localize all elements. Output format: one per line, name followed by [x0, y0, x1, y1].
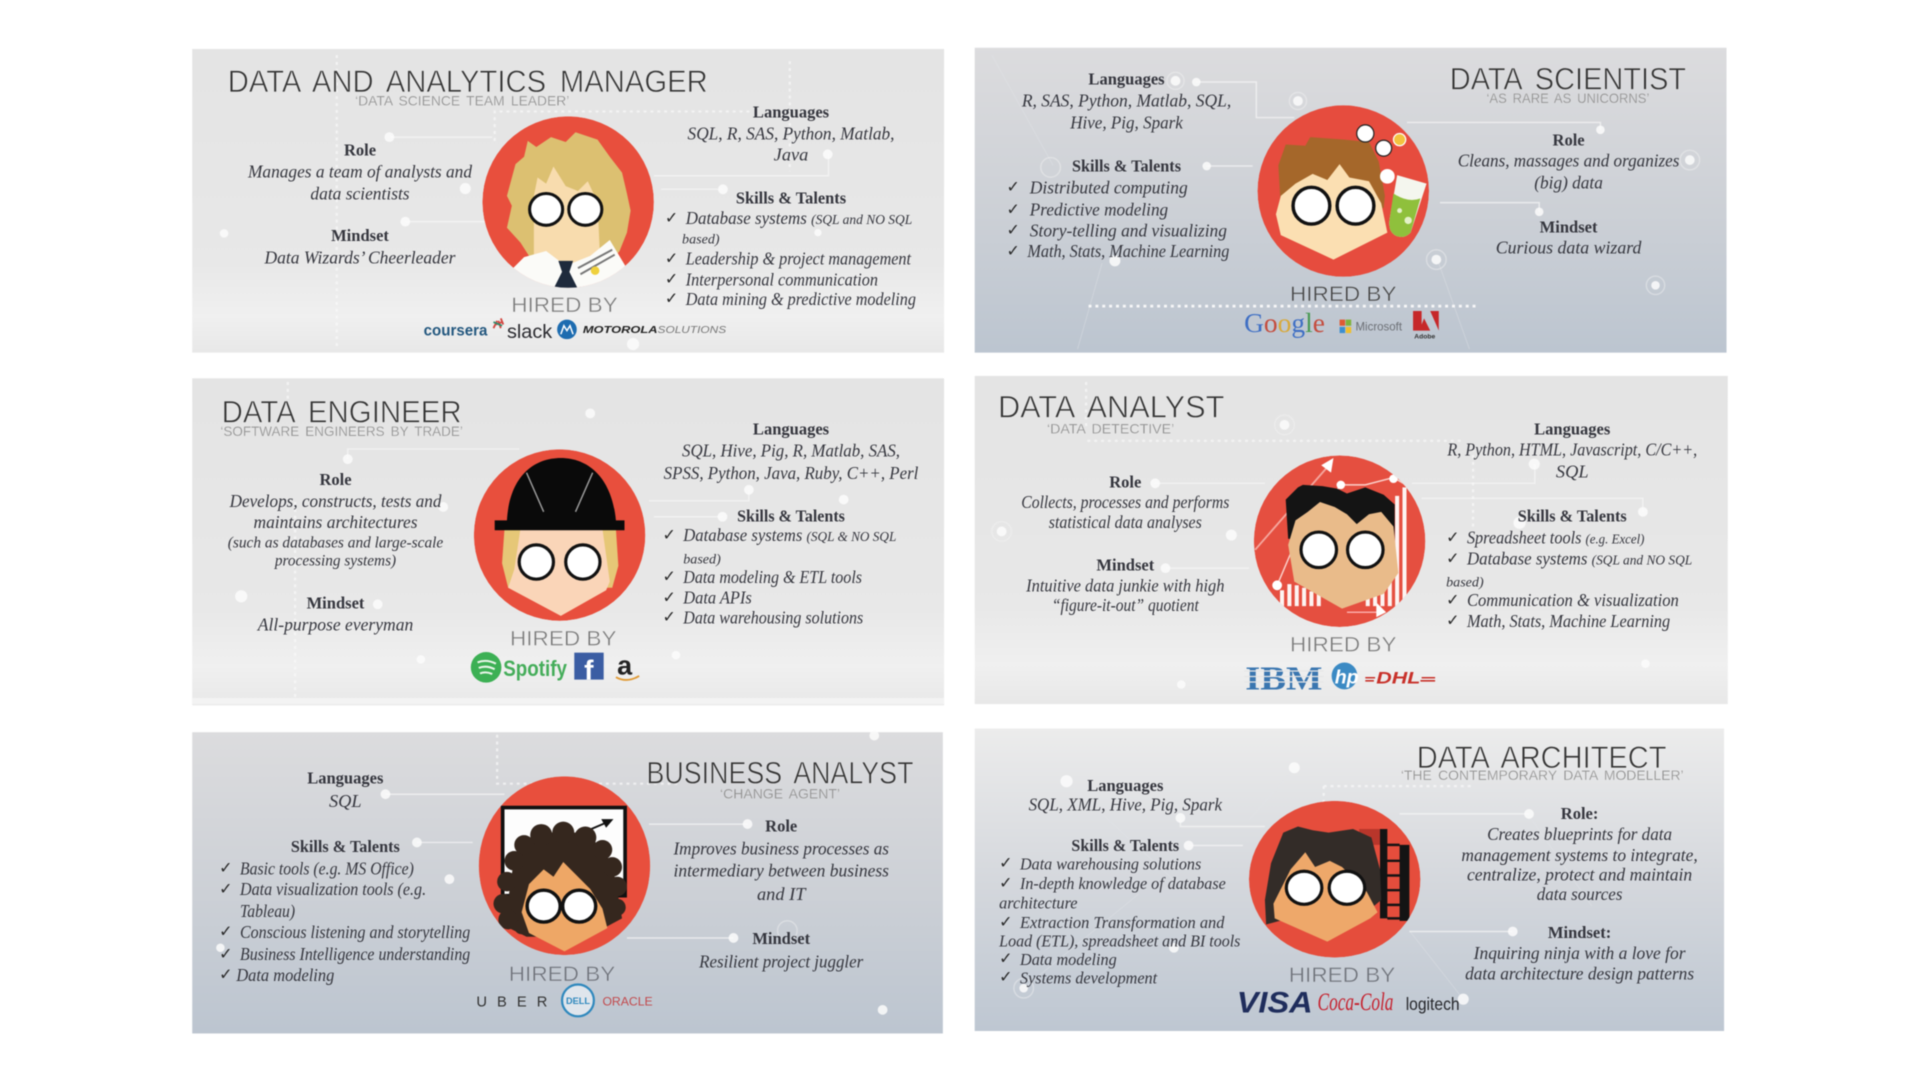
mindset block: “figure-it-out” quotient: [1052, 595, 1200, 615]
skills and talents list: Skills & Talents: [1518, 507, 1627, 526]
languages block: Languages: [753, 103, 830, 122]
role block: and IT: [757, 884, 807, 904]
title: DATA ANALYST: [998, 389, 1224, 425]
skills and talents list: Data modeling: [1019, 950, 1117, 969]
role block: Role: [319, 470, 352, 489]
title: DATA AND ANALYTICS MANAGER: [228, 63, 708, 99]
skills and talents list: based): [1446, 575, 1484, 591]
skills and talents list: ✓: [665, 208, 678, 227]
panel: data analyst: [975, 376, 1728, 704]
languages block: [1029, 776, 1223, 815]
hired by label: HIRED BY: [510, 627, 617, 650]
skills and talents list: Database systems (SQL & NO SQL: [682, 525, 896, 545]
skills and talents list: ✓: [1446, 611, 1459, 630]
skills and talents list: [1007, 156, 1229, 261]
skills and talents list: Tableau): [240, 901, 295, 921]
role block: intermediary between business: [673, 861, 889, 881]
mindset block: [264, 226, 456, 267]
skills and talents list: Predictive modeling: [1029, 200, 1168, 220]
connectors: [1014, 762, 1592, 1005]
subtitle: ‘THE CONTEMPORARY DATA MODELLER’: [1401, 767, 1684, 783]
portrait: scientist: [1258, 105, 1429, 277]
hired by label: HIRED BY: [1290, 633, 1397, 656]
logos: google, microsoft, adobe: Adobe: [1414, 334, 1435, 341]
skills and talents list: [998, 836, 1240, 987]
panel background: [192, 378, 944, 705]
logos: uber, dell, oracle: ORACLE: [602, 994, 653, 1008]
panel: data architect: [975, 729, 1724, 1031]
skills and talents list: ✓: [219, 879, 233, 898]
skills and talents list: [219, 837, 470, 985]
logos: google, microsoft, adobe: Microsoft: [1356, 320, 1403, 334]
languages block: R, Python, HTML, Javascript, C/C++,: [1446, 440, 1697, 460]
skills and talents list: ✓: [999, 912, 1013, 931]
skills and talents list: [1446, 507, 1692, 631]
skills and talents list: Data mining & predictive modeling: [685, 289, 916, 309]
subtitle: ‘DATA SCIENCE TEAM LEADER’: [355, 92, 569, 108]
skills and talents list: ✓: [999, 873, 1013, 892]
skills and talents list: Skills & Talents: [1071, 836, 1180, 855]
role block: [247, 141, 473, 204]
skills and talents list: ✓: [665, 248, 678, 267]
languages block: [1021, 69, 1231, 133]
portrait: analyst with chart: [1254, 456, 1425, 627]
mindset block: Intuitive data junkie with high: [1025, 575, 1224, 595]
languages block: Languages: [1087, 776, 1164, 795]
role block: [1021, 472, 1229, 532]
skills and talents list: Conscious listening and storytelling: [240, 922, 470, 942]
skills and talents list: ✓: [999, 967, 1013, 986]
mindset block: [698, 929, 864, 971]
panel: business analyst: [192, 731, 943, 1033]
panel background: [192, 49, 944, 353]
skills and talents list: ✓: [219, 858, 233, 877]
title: BUSINESS ANALYST: [647, 755, 913, 791]
skills and talents list: Extraction Transformation and: [1019, 913, 1225, 932]
skills and talents list: ✓: [219, 922, 233, 941]
role block: Creates blueprints for data: [1487, 824, 1672, 844]
skills and talents list: ✓: [1007, 241, 1020, 260]
skills and talents list: ✓: [665, 269, 678, 288]
skills and talents list: Communication & visualization: [1467, 590, 1679, 610]
logos: coursera, slack, motorola solutions: SOLUTIONS: [658, 325, 726, 336]
skills and talents list: ✓: [1007, 177, 1020, 196]
skills and talents list: architecture: [999, 894, 1078, 913]
skills and talents list: [662, 507, 896, 627]
skills and talents list: Spreadsheet tools (e.g. Excel): [1467, 528, 1645, 548]
logos: spotify, facebook, amazon: a: [617, 651, 633, 681]
role block: [1461, 804, 1698, 904]
panel background: [975, 376, 1728, 704]
mindset block: Mindset: [1540, 218, 1598, 237]
skills and talents list: Skills & Talents: [1072, 156, 1182, 175]
languages block: SPSS, Python, Java, Ruby, C++, Perl: [664, 463, 918, 483]
skills and talents list: Leadership & project management: [685, 248, 912, 268]
skills and talents list: Data visualization tools (e.g.: [239, 879, 426, 899]
logos: spotify, facebook, amazon: Spotify: [503, 656, 568, 681]
role block: management systems to integrate,: [1461, 845, 1698, 865]
languages block: Languages: [1534, 420, 1611, 439]
mindset block: [257, 594, 413, 635]
skills and talents list: ✓: [999, 853, 1013, 872]
skills and talents list: ✓: [999, 949, 1013, 968]
mindset block: [1496, 218, 1642, 257]
role block: Improves business processes as: [673, 839, 889, 859]
logos: visa, coca-cola, logitech: Coca-Cola: [1318, 987, 1393, 1016]
connectors: [992, 382, 1650, 689]
logos: coursera, slack, motorola solutions: [424, 318, 726, 343]
languages block: [688, 103, 894, 164]
subtitle: ‘AS RARE AS UNICORNS’: [1487, 90, 1649, 106]
skills and talents list: Math, Stats, Machine Learning: [1026, 241, 1229, 261]
panel: data scientist: [975, 48, 1727, 353]
languages block: Hive, Pig, Spark: [1069, 113, 1184, 133]
role block: processing systems): [274, 553, 396, 570]
portrait: business analyst with whiteboard: [479, 776, 650, 955]
skills and talents list: ✓: [662, 567, 676, 586]
skills and talents list: Skills & Talents: [291, 837, 400, 856]
logos: coursera, slack, motorola solutions: MOTOROLA: [583, 325, 658, 336]
logos: uber, dell, oracle: UBER: [476, 995, 547, 1011]
title: DATA ARCHITECT: [1417, 739, 1667, 775]
logos: google, microsoft, adobe: Google: [1244, 308, 1325, 338]
skills and talents list: Load (ETL), spreadsheet and BI tools: [998, 932, 1240, 951]
skills and talents list: Basic tools (e.g. MS Office): [240, 858, 414, 878]
logos: spotify, facebook, amazon: [471, 651, 639, 686]
role block: statistical data analyses: [1049, 512, 1202, 532]
title: DATA ENGINEER: [222, 393, 462, 429]
skills and talents list: ✓: [1007, 199, 1020, 218]
languages block: SQL, R, SAS, Python, Matlab,: [688, 124, 894, 144]
mindset block: Inquiring ninja with a love for: [1473, 943, 1686, 963]
skills and talents list: ✓: [662, 607, 676, 626]
logos: uber, dell, oracle: [476, 984, 653, 1016]
hired by label: HIRED BY: [511, 294, 618, 317]
skills and talents list: based): [682, 232, 720, 248]
logos: visa, coca-cola, logitech: logitech: [1406, 994, 1460, 1014]
logos: visa, coca-cola, logitech: [1237, 987, 1460, 1020]
role block: [673, 816, 889, 904]
skills and talents list: Math, Stats, Machine Learning: [1466, 611, 1670, 631]
skills and talents list: ✓: [662, 525, 676, 544]
subtitle: ‘CHANGE AGENT’: [720, 785, 840, 801]
subtitle: ‘SOFTWARE ENGINEERS BY TRADE’: [220, 423, 463, 439]
subtitle: ‘DATA DETECTIVE’: [1047, 420, 1174, 436]
panel background: [975, 729, 1724, 1031]
connectors: [192, 382, 944, 704]
skills and talents list: In-depth knowledge of database: [1019, 874, 1226, 893]
skills and talents list: Business Intelligence understanding: [240, 944, 470, 964]
mindset block: Mindset: [752, 929, 811, 948]
skills and talents list: Database systems (SQL and NO SQL: [1466, 548, 1692, 568]
role block: centralize, protect and maintain: [1467, 864, 1692, 884]
portrait: manager: [482, 116, 654, 300]
mindset block: Data Wizards’ Cheerleader: [264, 247, 456, 267]
mindset block: All-purpose everyman: [257, 615, 413, 635]
skills and talents list: ✓: [665, 289, 678, 308]
logos: ibm, hp, dhl: [1244, 659, 1435, 697]
languages block: SQL: [329, 791, 362, 811]
skills and talents list: Data warehousing solutions: [1019, 854, 1201, 873]
role block: Manages a team of analysts and: [247, 162, 473, 182]
logos: ibm, hp, dhl: hp: [1335, 666, 1359, 688]
languages block: Languages: [753, 420, 830, 439]
mindset block: Mindset: [1096, 556, 1155, 575]
skills and talents list: ✓: [1007, 220, 1020, 239]
role block: Collects, processes and performs: [1021, 492, 1229, 512]
languages block: [307, 769, 384, 811]
role block: data sources: [1537, 884, 1622, 904]
languages block: Languages: [1088, 69, 1165, 88]
logos: uber, dell, oracle: DELL: [566, 996, 590, 1006]
panel: data engineer: [192, 378, 944, 705]
role block: (big) data: [1534, 173, 1603, 194]
logos: ibm, hp, dhl: IBM: [1245, 659, 1322, 697]
skills and talents list: [665, 188, 916, 309]
skills and talents list: ✓: [1446, 590, 1459, 609]
languages block: R, SAS, Python, Matlab, SQL,: [1021, 91, 1231, 111]
role block: [1458, 131, 1679, 194]
role block: Role: [1553, 131, 1585, 150]
logos: ibm, hp, dhl: DHL: [1376, 668, 1420, 687]
hired by label: HIRED BY: [1290, 283, 1397, 306]
role block: Role: [344, 141, 376, 160]
skills and talents list: ✓: [1446, 527, 1459, 546]
skills and talents list: ✓: [219, 965, 233, 984]
role block: maintains architectures: [253, 512, 418, 532]
languages block: SQL: [1556, 462, 1589, 482]
role block: Cleans, massages and organizes: [1458, 151, 1679, 171]
skills and talents list: Systems development: [1020, 968, 1158, 987]
skills and talents list: based): [683, 551, 721, 567]
panel background: [192, 732, 943, 1033]
mindset block: [1025, 556, 1224, 615]
languages block: Java: [774, 144, 808, 164]
skills and talents list: Data modeling & ETL tools: [682, 567, 862, 587]
portrait: architect with brick wall: [1249, 801, 1420, 958]
mindset block: [1465, 923, 1694, 984]
role block: Role:: [1561, 804, 1598, 823]
panel: data and analytics manager: [192, 49, 944, 353]
skills and talents list: Skills & Talents: [736, 188, 847, 207]
skills and talents list: ✓: [219, 944, 233, 963]
portrait: engineer: [474, 449, 645, 621]
skills and talents list: ✓: [662, 587, 676, 606]
connectors: [992, 55, 1700, 349]
panel background: [975, 48, 1727, 353]
connectors: [220, 55, 833, 350]
skills and talents list: ✓: [1446, 548, 1459, 567]
languages block: SQL, Hive, Pig, R, Matlab, SAS,: [682, 441, 900, 461]
connectors: [216, 731, 888, 1015]
skills and talents list: Skills & Talents: [737, 507, 845, 526]
mindset block: data architecture design patterns: [1465, 964, 1694, 984]
languages block: [664, 420, 918, 483]
hired by label: HIRED BY: [509, 963, 615, 986]
skills and talents list: Distributed computing: [1029, 177, 1188, 197]
languages block: [1446, 420, 1697, 482]
mindset block: Curious data wizard: [1496, 237, 1642, 257]
mindset block: Resilient project juggler: [698, 951, 864, 971]
logos: google, microsoft, adobe: [1244, 308, 1439, 341]
logos: spotify, facebook, amazon: f: [584, 655, 594, 686]
skills and talents list: Data APIs: [682, 588, 752, 608]
role block: Role: [765, 816, 797, 835]
logos: coursera, slack, motorola solutions: coursera: [424, 323, 487, 340]
logos: visa, coca-cola, logitech: VISA: [1237, 987, 1313, 1020]
skills and talents list: Story-telling and visualizing: [1030, 220, 1227, 240]
role block: Role: [1109, 472, 1141, 491]
hired by label: HIRED BY: [1289, 964, 1395, 987]
skills and talents list: Data warehousing solutions: [682, 607, 863, 627]
skills and talents list: Database systems (SQL and NO SQL: [685, 208, 912, 228]
skills and talents list: Interpersonal communication: [685, 269, 878, 289]
mindset block: Mindset:: [1548, 923, 1611, 942]
logos: coursera, slack, motorola solutions: slack: [507, 321, 552, 343]
title: DATA SCIENTIST: [1450, 60, 1686, 96]
skills and talents list: Data modeling: [235, 965, 334, 985]
role block: (such as databases and large-scale: [228, 534, 443, 551]
role block: [228, 470, 443, 570]
role block: data scientists: [310, 184, 410, 204]
mindset block: Mindset: [331, 226, 389, 245]
mindset block: Mindset: [307, 594, 365, 613]
languages block: Languages: [307, 769, 384, 788]
role block: Develops, constructs, tests and: [229, 491, 442, 511]
languages block: SQL, XML, Hive, Pig, Spark: [1029, 795, 1223, 815]
